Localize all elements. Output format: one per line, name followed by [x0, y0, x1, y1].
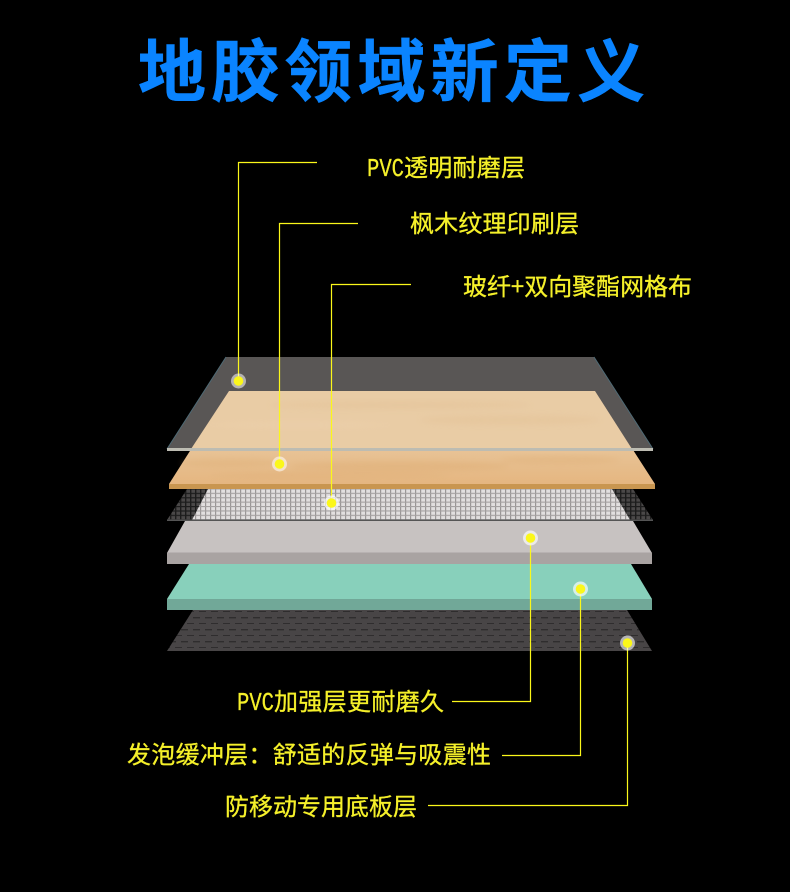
title: 地胶领域新定义: [138, 35, 645, 111]
label: PVC wear layer: 透明耐磨层: [404, 148, 525, 183]
leader: maple wood print: [272, 224, 358, 472]
leader: PVC wear layer: [231, 162, 317, 388]
layer: clear PVC wear layer: [167, 357, 653, 451]
leader: PVC reinforcement: [452, 530, 538, 702]
label: maple wood print: 枫木纹理印刷层: [410, 204, 579, 239]
leader: foam cushion: [502, 582, 588, 756]
label: PVC wear layer: PVC: [367, 154, 404, 184]
label: fiberglass mesh: 玻纤+双向聚酯网格布: [463, 267, 692, 302]
layer: PVC reinforcement: [167, 521, 652, 564]
layer: foam cushion: [167, 564, 652, 610]
leader: fiberglass mesh: [324, 284, 411, 510]
layer: maple wood print: [169, 391, 655, 489]
label: PVC reinforcement: 加强层更耐磨久: [274, 682, 444, 717]
layer: fiberglass mesh: [167, 489, 653, 521]
layer: anti-slip base: [167, 610, 652, 651]
leader: anti-slip base: [428, 636, 635, 806]
label: anti-slip base: 防移动专用底板层: [225, 787, 417, 822]
label: foam cushion: 发泡缓冲层：舒适的反弹与吸震性: [127, 735, 491, 770]
label: PVC reinforcement: PVC: [237, 688, 274, 718]
